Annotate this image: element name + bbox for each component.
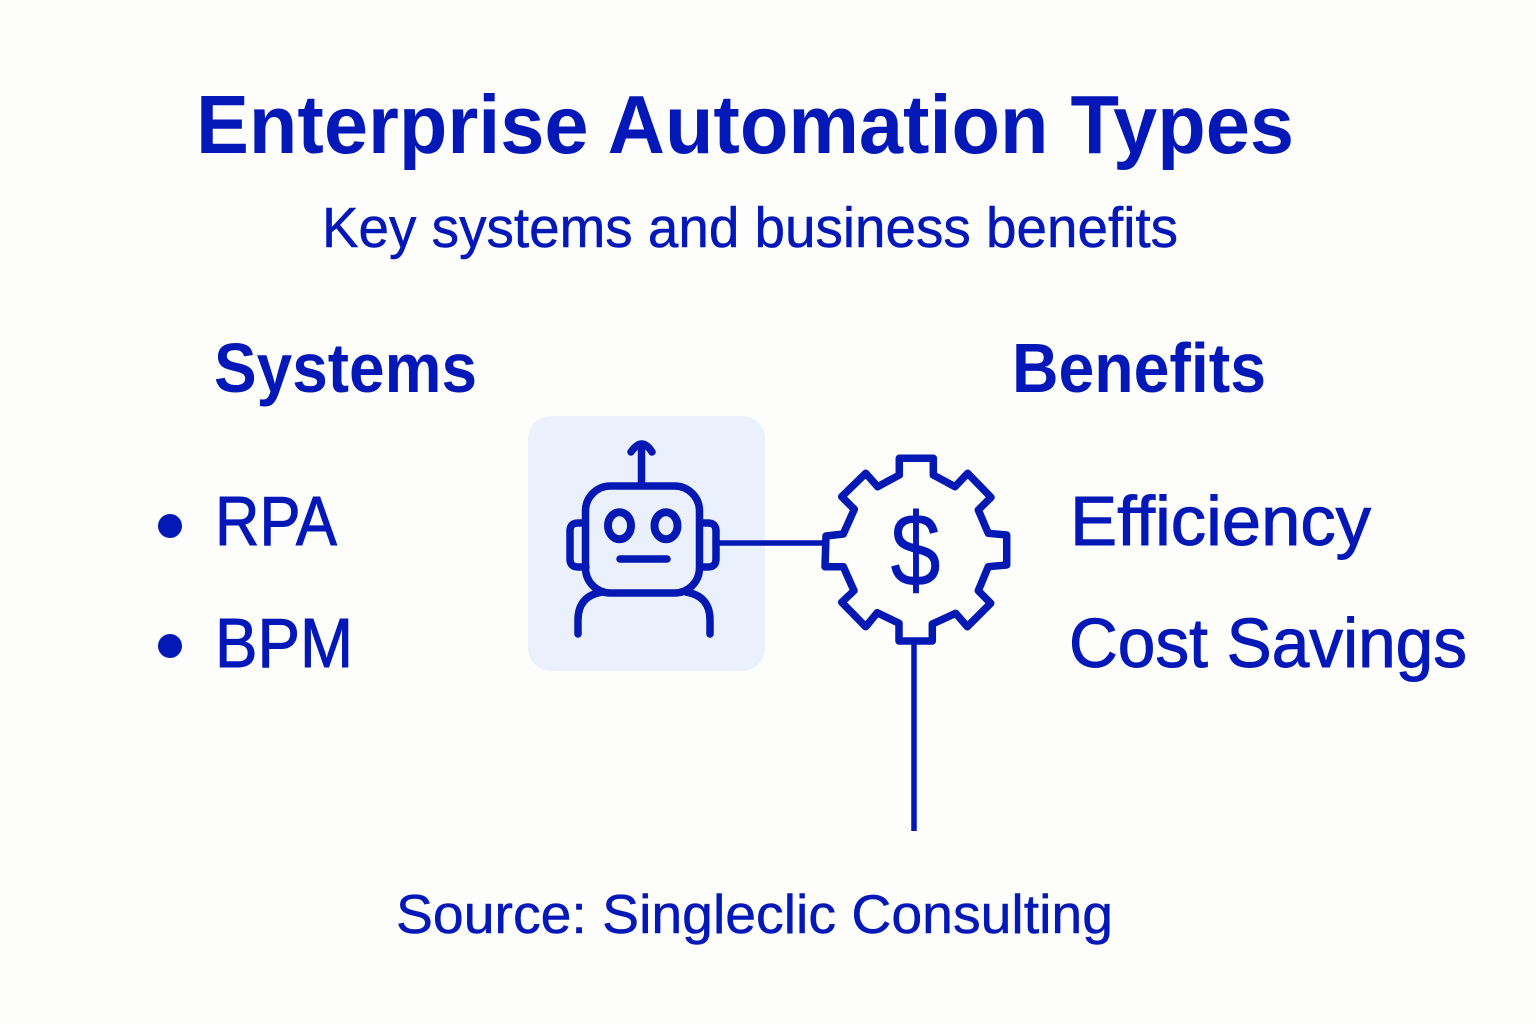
list item: RPA xyxy=(158,482,337,560)
icon: robot xyxy=(570,444,716,634)
icon: dollar gear: $ xyxy=(890,493,940,609)
icon: robot panel xyxy=(528,416,765,671)
panel: systems xyxy=(158,329,477,682)
list item: BPM: BPM xyxy=(215,604,353,682)
panel: benefits xyxy=(1012,329,1467,682)
heading: systems: Systems xyxy=(214,329,477,407)
subtitle: Key systems and business benefits xyxy=(322,196,1178,260)
heading: benefits: Benefits xyxy=(1012,329,1266,407)
list item: cost savings: Cost Savings xyxy=(1069,604,1467,682)
list item: efficiency: Efficiency xyxy=(1070,482,1371,560)
source note: Source: Singleclic Consulting xyxy=(396,883,1113,945)
connector: robot to gear xyxy=(717,540,826,546)
list item: RPA: RPA xyxy=(215,482,337,560)
title: Enterprise Automation Types xyxy=(196,78,1294,171)
list item: BPM xyxy=(158,604,353,682)
icon: dollar gear xyxy=(825,458,1007,641)
connector: gear to source xyxy=(911,641,917,831)
